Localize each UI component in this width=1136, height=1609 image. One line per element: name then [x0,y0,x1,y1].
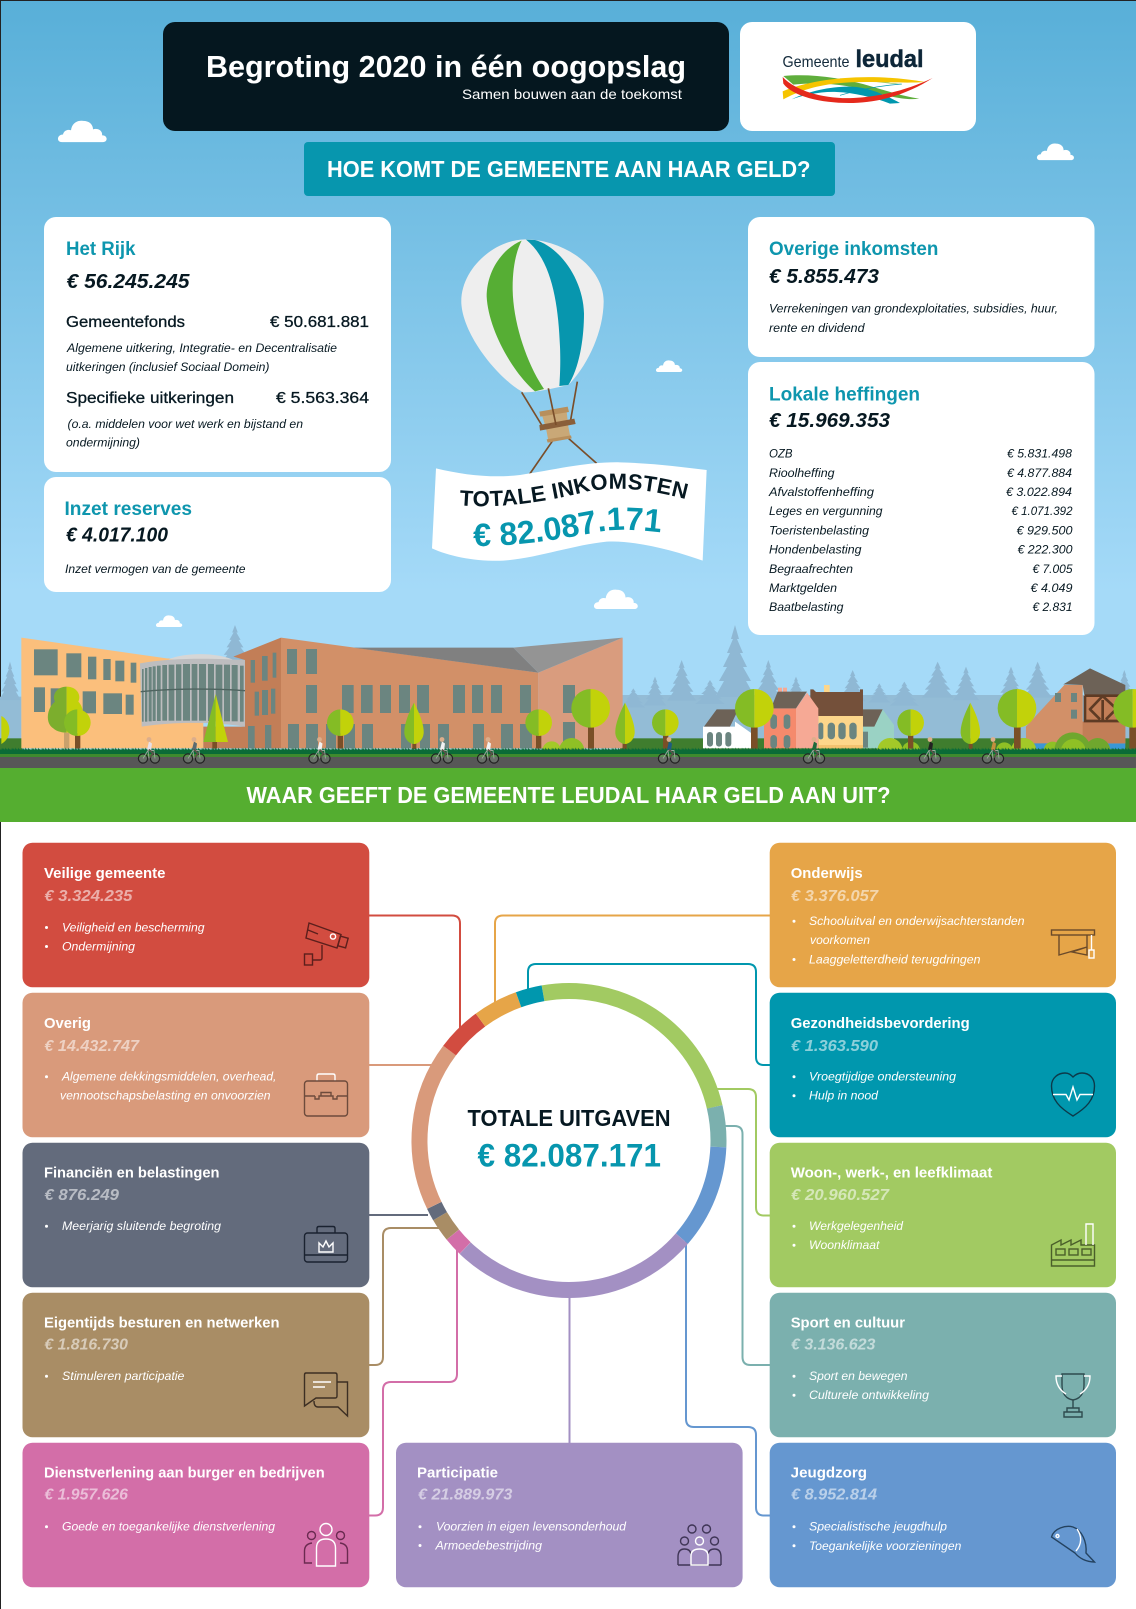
icon: factory [1052,1224,1094,1266]
card amount: € 1.957.626 [44,1487,128,1504]
card title: Sport en cultuur [791,1314,905,1331]
card title: Eigentijds besturen en netwerken [44,1314,280,1331]
card bullets: Toegankelijke voorzieningen [809,1539,962,1553]
subtitle: Samen bouwen aan de toekomst [462,86,682,102]
card: Dienstverlening aan burger en bedrijven [22,1443,369,1587]
table of levies: € 4.877.884 [1007,468,1072,480]
banner amount path [473,530,663,546]
card bullets: Laaggeletterdheid terugdringen [809,952,981,966]
main title: Begroting 2020 in één oogopslag [206,50,686,84]
heading: Overige inkomsten [769,239,938,260]
card title: Overig [44,1015,91,1032]
row: Specifieke uitkeringen: Specifieke uitkeringen [66,390,234,407]
description second line: uitkeringen (inclusief Sociaal Domein) [66,362,270,374]
card: Veilige gemeente [22,843,369,987]
amount: € 5.855.473 [769,266,879,288]
row amount: € 5.563.364 [276,390,369,407]
table of levies: € 2.831 [1032,602,1072,614]
card: Gezondheidsbevordering [770,993,1116,1137]
icon: trophy [1056,1374,1090,1417]
cloud: top right [1037,144,1074,160]
card bullets: Culturele ontwikkeling [809,1388,929,1402]
heading text: WAAR GEEFT DE GEMEENTE LEUDAL HAAR GELD AAN UIT? [246,782,890,808]
card bullets: vennootschapsbelasting en onvoorzien [60,1089,271,1103]
illustration: hot air balloon with banner [432,239,707,561]
table of levies [768,448,1073,614]
section heading: income [304,142,835,196]
ground behind town [620,738,1136,750]
table of levies: Rioolheffing [769,468,835,480]
card bullets: Werkgelegenheid [809,1219,903,1233]
card amount: € 21.889.973 [418,1487,513,1504]
logo wordmark large: leudal [856,46,924,73]
total amount: € 56.245.245 [66,271,190,293]
title banner [163,22,729,131]
ground left [0,738,22,750]
trees and bushes [735,689,1136,769]
cloud: top left [58,121,107,142]
description: (o.a. middelen voor wet werk en bijstand en [68,419,303,431]
logo wordmark small: Gemeente [782,54,850,71]
salmon house [778,688,782,702]
ring segments [358,929,780,1352]
green house [863,709,894,748]
trees centre [404,689,679,763]
card bullets: Goede en toegankelijke dienstverlening [62,1520,275,1534]
icon: heart with pulse [1052,1073,1094,1116]
heading: Inzet reserves [64,499,192,520]
panel: Inzet reserves [44,477,391,592]
card bullets [45,920,205,954]
description: Verrekeningen van grondexploitaties, subsidies, huur, [769,304,1058,316]
balloon envelope [461,239,604,392]
card bullets: Voorzien in eigen levensonderhoud [436,1520,626,1534]
card amount: € 20.960.527 [791,1187,890,1204]
illustration: town with cyclists [0,625,1136,769]
card title: Financiën en belastingen [44,1165,220,1182]
sky background [0,0,1136,822]
card bullets: Vroegtijdige ondersteuning [809,1070,956,1084]
banner heading: TOTALE INKOMSTEN [460,474,688,506]
panel: Overige inkomsten [748,217,1094,357]
section heading: expenses [0,768,1136,822]
card bullets [792,914,1025,966]
icon: treasury case [304,1226,348,1262]
card bullets: Armoedebestrijding [434,1538,542,1552]
table of levies: € 929.500 [1016,525,1073,537]
ring title: TOTALE UITGAVEN [468,1105,670,1131]
brick building [203,638,623,749]
row: Gemeentefonds: Gemeentefonds [66,314,185,331]
row amount: € 50.681.881 [270,314,369,331]
icon: people [304,1524,348,1566]
table of levies: Baatbelasting [769,602,844,614]
table of levies: Leges en vergunning [769,506,883,518]
icon: chat bubbles [304,1373,348,1416]
card amount: € 876.249 [44,1187,119,1204]
card title: Jeugdzorg [791,1464,867,1481]
cloud: above town [594,590,638,609]
cyclists [138,737,1004,763]
icon: security camera [304,923,348,965]
card amount: € 14.432.747 [44,1038,140,1055]
table of levies: Begraafrechten [769,564,853,576]
icon: group [678,1525,721,1565]
table of levies: € 3.022.894 [1006,487,1072,499]
card title: Veilige gemeente [44,865,166,882]
card amount: € 1.816.730 [44,1337,128,1354]
card bullets: Stimuleren participatie [62,1369,185,1383]
amount: € 4.017.100 [66,524,168,546]
card bullets: Woonklimaat [809,1238,880,1252]
card title: Dienstverlening aan burger en bedrijven [44,1464,325,1481]
table of levies: € 7.005 [1032,564,1073,576]
banner [432,462,707,561]
table of levies: € 5.831.498 [1007,448,1073,460]
card bullets: Hulp in nood [809,1089,878,1103]
heading: Lokale heffingen [769,384,920,406]
mill building [1026,685,1125,743]
card bullets: Ondermijning [62,940,135,954]
card: Overig [22,993,369,1137]
card bullets [792,1369,929,1402]
card bullets [792,1070,956,1103]
card: Financiën en belastingen [22,1143,369,1287]
card bullets: Schooluitval en onderwijsachterstanden [809,914,1025,928]
table of levies: OZB [769,448,793,460]
card: Woon-, werk-, en leefklimaat [770,1143,1116,1287]
card title: Participatie [417,1464,498,1481]
card bullets: Meerjarig sluitende begroting [62,1219,221,1233]
description second line: rente en dividend [769,323,865,335]
card bullets [792,1219,903,1252]
ring total: € 82.087.171 [478,1138,661,1174]
heading: Het Rijk [66,239,136,260]
table of levies: € 1.071.392 [1012,506,1073,518]
card bullets [418,1520,626,1552]
trees left [1,687,354,749]
table of levies: Afvalstoffenheffing [768,487,875,499]
table of levies: € 222.300 [1018,545,1073,557]
balloon ropes [522,382,597,476]
cloud: beside balloon [656,360,682,372]
card amount: € 3.376.057 [791,888,879,905]
card bullets [45,1070,276,1103]
table of levies: Marktgelden [769,583,837,595]
card title: Gezondheidsbevordering [791,1015,970,1032]
ring chart: total expenses [358,929,780,1352]
card: Eigentijds besturen en netwerken [22,1293,369,1437]
icon: graduation cap [1052,930,1094,958]
description second line: ondermijning) [66,438,140,450]
card amount: € 3.324.235 [44,888,133,905]
white house [703,709,752,748]
yellow house [818,715,863,748]
card amount: € 8.952.814 [791,1487,877,1504]
card: Sport en cultuur [770,1293,1116,1437]
card bullets: voorkomen [810,933,870,947]
grass [0,746,1136,757]
card bullets: Sport en bewegen [809,1369,908,1383]
banner label: curved text [459,489,687,506]
card bullets [792,1520,962,1553]
forest backdrop [0,625,1136,740]
road [0,757,1136,768]
cloud: small left [156,615,182,627]
connector lines [369,916,770,1516]
icon: suitcase [304,1074,348,1116]
card amount: € 3.136.623 [791,1337,876,1354]
town artwork [0,625,1136,769]
description: Inzet vermogen van de gemeente [65,564,246,576]
table of levies: € 4.049 [1030,583,1073,595]
table of levies: Toeristenbelasting [769,525,870,537]
orange building [21,638,203,748]
water [1033,741,1125,749]
card title: Woon-, werk-, en leefklimaat [791,1165,992,1182]
panel: Het Rijk [44,217,391,472]
table of levies: Hondenbelasting [769,545,862,557]
logo ribbons [783,75,933,104]
amount: € 15.969.353 [769,410,890,432]
houses and trees right [703,668,1136,769]
card: Participatie [396,1443,743,1587]
card bullets: Algemene dekkingsmiddelen, overhead, [61,1070,276,1084]
card amount: € 1.363.590 [791,1038,878,1055]
card: Onderwijs [770,843,1116,987]
banner amount: € 82.087.171 [473,508,660,546]
card bullets: Veiligheid en bescherming [62,920,205,934]
card bullets: Specialistische jeugdhulp [809,1520,947,1534]
card title: Onderwijs [791,865,863,882]
card: Jeugdzorg [770,1443,1116,1587]
panel: Lokale heffingen [748,362,1094,635]
description: Algemene uitkering, Integratie- en Decentralisatie [66,343,337,355]
glass rotunda [140,654,245,727]
logo: Gemeente Leudal [740,22,976,131]
icon: baseball cap [1052,1526,1094,1562]
balloon basket [539,388,576,443]
heading text: HOE KOMT DE GEMEENTE AAN HAAR GELD? [327,156,810,182]
